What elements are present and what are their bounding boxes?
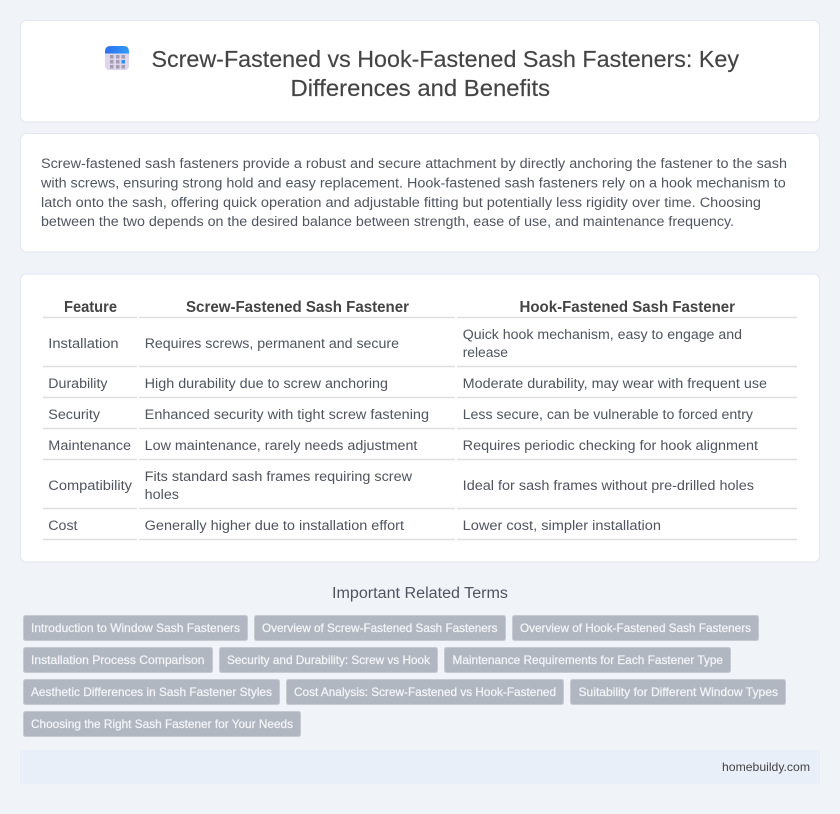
row: security: Less secure, can be vulnerable to forced entry xyxy=(463,407,754,423)
panel: comparison table xyxy=(20,274,820,562)
panel: title header xyxy=(20,20,820,122)
row: compatibility: holes xyxy=(145,487,179,503)
tag xyxy=(512,616,758,640)
row: installation: release xyxy=(463,345,508,361)
row: durability xyxy=(48,376,767,392)
title: Screw-Fastened vs Hook-Fastened Sash Fasteners: Key xyxy=(152,46,739,72)
tag: Aesthetic Differences in Sash Fastener Styles xyxy=(31,685,272,699)
row: maintenance xyxy=(48,438,758,454)
row: installation: Installation xyxy=(48,336,119,352)
row: security: Enhanced security with tight screw fastening xyxy=(145,407,429,423)
row: security: Security xyxy=(48,407,101,423)
tag xyxy=(24,680,280,704)
panel: description: with screws, ensuring strong hold and easy replacement. Hook-fastened sash fasteners rely on a hook mechanism to xyxy=(40,176,786,192)
icon: calendar xyxy=(105,46,129,70)
panel: description: latch onto the sash, offering quick operation and adjustable fitting but potentially less rigidity over time. Choosing xyxy=(41,195,761,211)
row: cost xyxy=(48,518,661,534)
row: cost: Lower cost, simpler installation xyxy=(463,518,661,534)
table header: Hook-Fastened Sash Fastener xyxy=(520,299,735,316)
row: durability: Durability xyxy=(48,376,108,392)
tag: Suitability for Different Window Types xyxy=(578,685,778,699)
footer xyxy=(20,750,820,784)
row: security xyxy=(48,407,754,423)
panel: description: Screw-fastened sash fasteners provide a robust and secure attachment by directly anchoring the fastener to the sash xyxy=(41,156,787,172)
row: installation: Quick hook mechanism, easy to engage and xyxy=(463,327,742,343)
row: installation xyxy=(48,327,742,361)
tag: Cost Analysis: Screw-Fastened vs Hook-Fastened xyxy=(294,685,556,699)
tag: Overview of Screw-Fastened Sash Fasteners xyxy=(262,621,498,635)
tag: Security and Durability: Screw vs Hook xyxy=(227,653,431,667)
title: Differences and Benefits xyxy=(290,75,550,101)
tag xyxy=(24,648,212,672)
tag xyxy=(570,680,786,704)
tag xyxy=(444,648,730,672)
table header: Feature xyxy=(64,299,117,316)
row: maintenance: Requires periodic checking for hook alignment xyxy=(463,438,758,454)
row: maintenance: Maintenance xyxy=(48,438,131,454)
panel: description: between the two depends on the desired balance between strength, ease of use, and maintenance frequency. xyxy=(41,214,734,230)
tag xyxy=(286,680,564,704)
tag: Maintenance Requirements for Each Fastener Type xyxy=(452,653,723,667)
table header: Screw-Fastened Sash Fastener xyxy=(186,299,409,316)
panel: description xyxy=(20,134,820,252)
row: durability: High durability due to screw anchoring xyxy=(145,376,388,392)
table header xyxy=(64,299,735,316)
row: compatibility xyxy=(48,469,754,503)
row: maintenance: Low maintenance, rarely needs adjustment xyxy=(145,438,417,454)
tag xyxy=(24,712,300,736)
row: installation: Requires screws, permanent and secure xyxy=(145,336,399,352)
row: compatibility: Compatibility xyxy=(48,478,133,494)
heading: important related terms: Important Related Terms xyxy=(332,585,508,602)
tag: Introduction to Window Sash Fasteners xyxy=(31,621,240,635)
footer: homebuildy.com xyxy=(722,760,810,774)
row: cost: Cost xyxy=(48,518,78,534)
row: compatibility: Ideal for sash frames without pre-drilled holes xyxy=(463,478,754,494)
tag xyxy=(220,648,438,672)
row: compatibility: Fits standard sash frames requiring screw xyxy=(145,469,413,485)
tag xyxy=(254,616,506,640)
tag: Overview of Hook-Fastened Sash Fasteners xyxy=(520,621,751,635)
row: cost: Generally higher due to installation effort xyxy=(145,518,404,534)
tag xyxy=(24,616,248,640)
panel: related term tags xyxy=(24,616,786,736)
row: durability: Moderate durability, may wear with frequent use xyxy=(463,376,767,392)
tag: Choosing the Right Sash Fastener for Your Needs xyxy=(31,717,293,731)
tag: Installation Process Comparison xyxy=(31,653,204,667)
title xyxy=(152,46,739,101)
